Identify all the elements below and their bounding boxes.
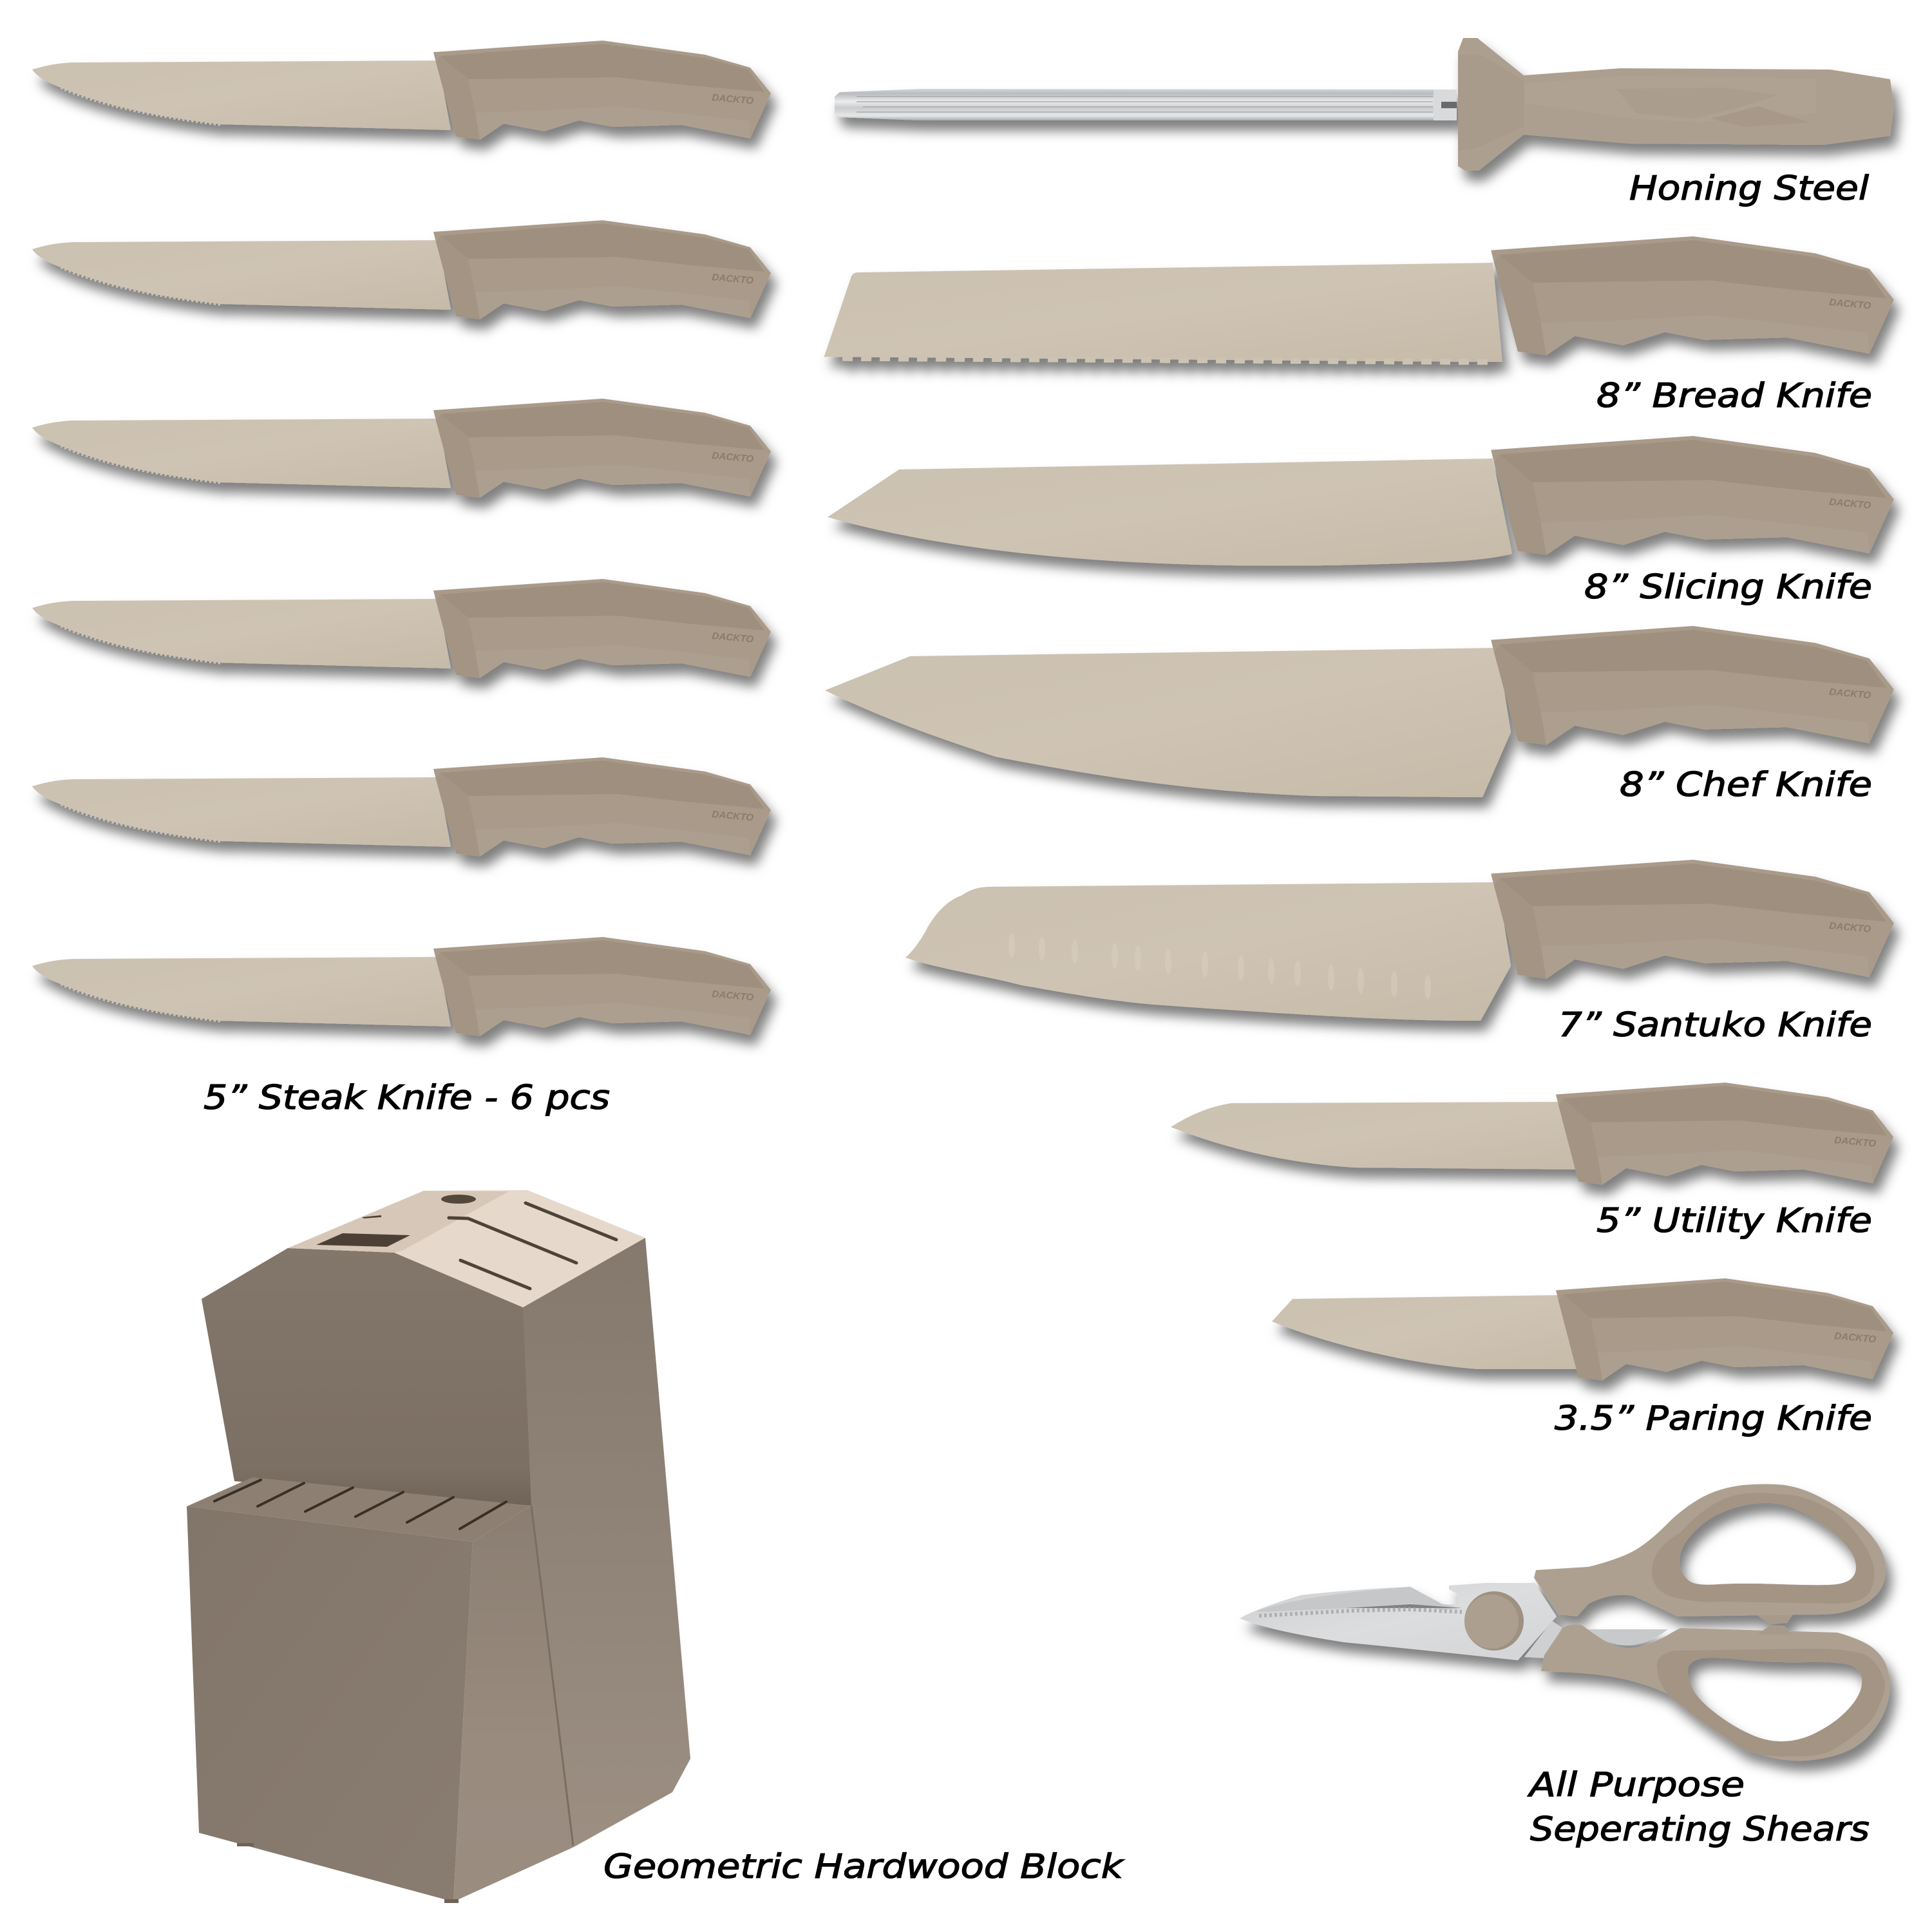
steak knife 2	[32, 220, 771, 319]
block top with slots	[288, 1190, 645, 1307]
steak knife 4	[32, 579, 771, 678]
label: bread knife: 8” Bread Knife	[1596, 377, 1872, 415]
kitchen shears	[1240, 1484, 1890, 1761]
steak knife 5	[32, 757, 771, 857]
block back face	[202, 1248, 547, 1507]
paring knife: DACKTO	[1834, 1331, 1877, 1345]
shears inner teeth	[1587, 1629, 1668, 1645]
paring knife	[1272, 1278, 1893, 1381]
label: santuko knife: 7” Santuko Knife	[1558, 1006, 1872, 1045]
honing steel	[835, 38, 1894, 171]
block groove	[531, 1506, 573, 1846]
shears bottom handle band	[1657, 1649, 1885, 1757]
label: shears line 2: Seperating Shears	[1530, 1810, 1870, 1849]
shears top handle band	[1652, 1493, 1875, 1604]
steak knife 6	[32, 937, 771, 1036]
santuko knife: DACKTO	[1829, 920, 1871, 935]
steak knife 2: DACKTO	[712, 272, 754, 287]
slicing knife: DACKTO	[1829, 497, 1871, 511]
chef knife: DACKTO	[1829, 687, 1871, 701]
utility knife: DACKTO	[1834, 1135, 1877, 1150]
label: steak knife: 5” Steak Knife - 6 pcs	[204, 1079, 610, 1117]
label: paring knife: 3.5” Paring Knife	[1555, 1399, 1872, 1438]
bread knife	[824, 236, 1894, 362]
steak knife 4: DACKTO	[712, 630, 754, 645]
chef knife	[825, 626, 1894, 797]
bread knife: DACKTO	[1829, 297, 1871, 312]
steak knife 6: DACKTO	[712, 989, 754, 1003]
shears top handle	[1534, 1484, 1886, 1616]
slicing knife	[828, 436, 1894, 566]
steak knife 3: DACKTO	[712, 450, 754, 465]
label: slicing knife: 8” Slicing Knife	[1584, 568, 1872, 607]
santuko knife	[905, 860, 1894, 1021]
label: chef knife: 8” Chef Knife	[1620, 766, 1872, 804]
steak knife 1: DACKTO	[712, 92, 754, 107]
knife block	[187, 1190, 690, 1903]
shears main blade	[1240, 1583, 1557, 1660]
block feet	[237, 1843, 459, 1903]
label: honing steel: Honing Steel	[1629, 169, 1870, 208]
steak knife 1	[32, 41, 771, 140]
shears lock tab	[1757, 1615, 1792, 1624]
steak knife 3	[32, 399, 771, 498]
label: shears line 1: All Purpose	[1528, 1766, 1745, 1804]
steak knife 5: DACKTO	[712, 809, 754, 824]
shears lower blade strip	[1524, 1621, 1562, 1658]
utility knife	[1171, 1083, 1893, 1185]
block lower front face	[187, 1506, 473, 1902]
label: block: Geometric Hardwood Block	[603, 1848, 1124, 1886]
block lower top with slots	[187, 1477, 531, 1542]
shears pivot	[1464, 1591, 1524, 1651]
block right face	[523, 1238, 690, 1847]
block lower side face	[453, 1506, 574, 1902]
shears bottom handle	[1541, 1624, 1890, 1761]
label: utility knife: 5” Utility Knife	[1596, 1202, 1872, 1240]
